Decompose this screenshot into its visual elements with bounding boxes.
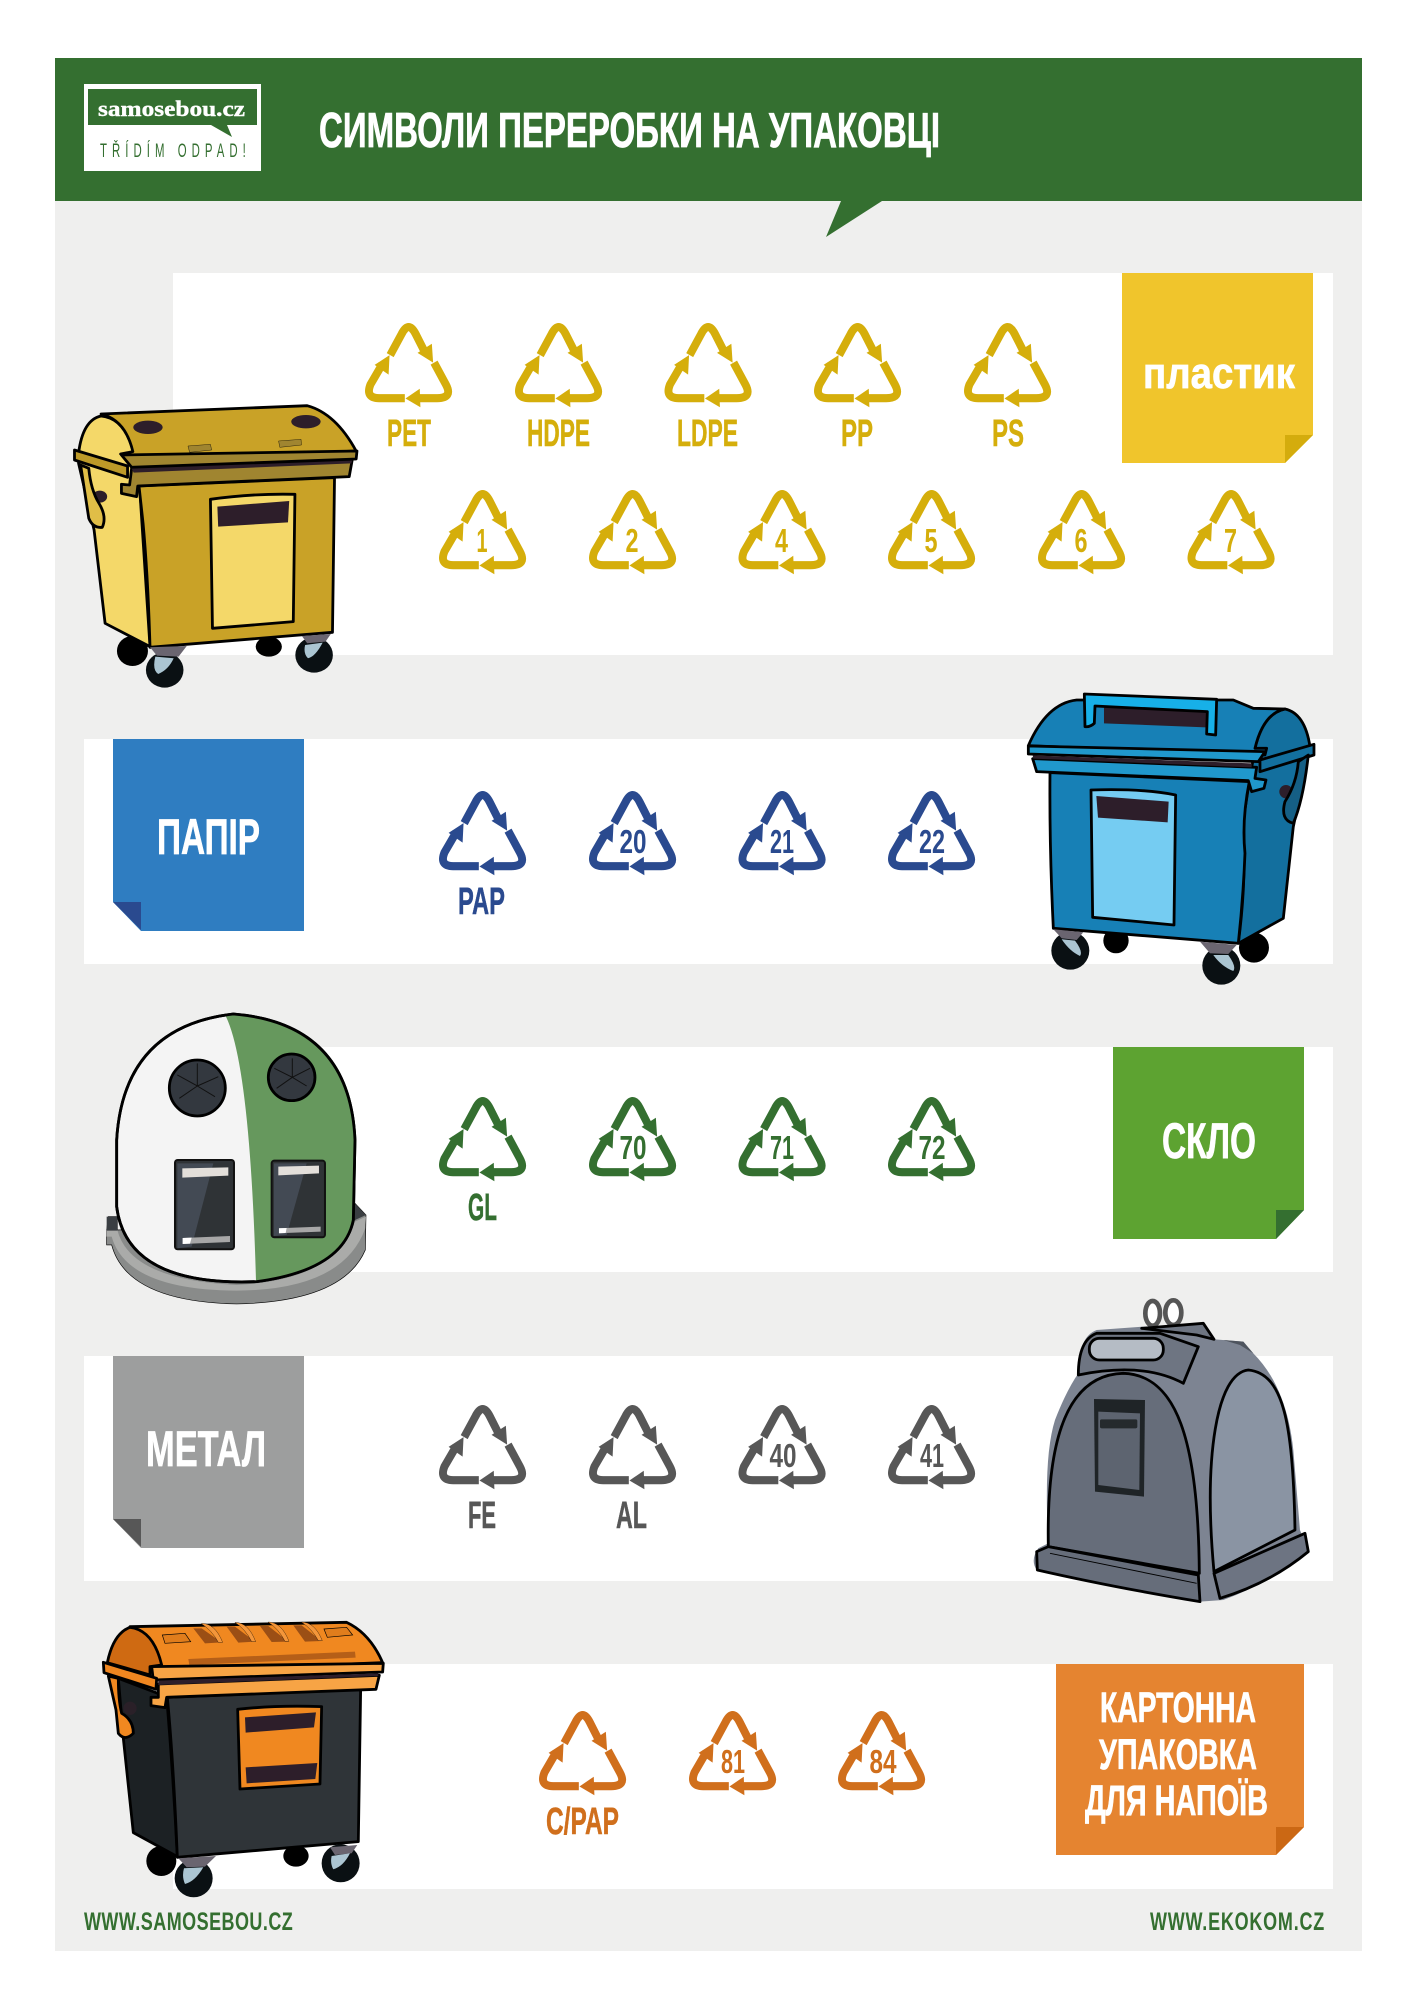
label: beverage carton: КАРТОННА — [1100, 1684, 1256, 1732]
title: СИМВОЛИ ПЕРЕРОБКИ НА УПАКОВЦІ — [319, 104, 940, 158]
panel: plastic row — [173, 273, 1333, 655]
recycling symbols: plastic: 5 — [924, 522, 938, 559]
icon: orange bin — [103, 1622, 383, 1897]
icon: yellow bin — [74, 406, 357, 688]
recycling symbols: glass: GL — [468, 1187, 497, 1229]
logo: samosebou.cz — [98, 96, 245, 121]
icon: blue bin — [1028, 694, 1314, 985]
recycling symbols: glass: 71 — [770, 1129, 794, 1166]
recycling symbols: plastic: LDPE — [677, 413, 738, 455]
recycling symbols: plastic: 2 — [626, 522, 638, 559]
recycling symbols: plastic: PET — [387, 413, 431, 455]
label: metal — [113, 1356, 304, 1548]
footer link: ekokom: WWW.EKOKOM.CZ — [1150, 1907, 1324, 1936]
recycling symbols: plastic: 1 — [476, 522, 488, 559]
label: metal: МЕТАЛ — [146, 1421, 266, 1477]
header banner — [55, 58, 1362, 237]
recycling symbols: plastic: 6 — [1074, 522, 1088, 559]
panel: metal row — [84, 1356, 1333, 1581]
panel: glass row — [173, 1047, 1333, 1272]
panel: paper row — [84, 739, 1333, 964]
label: glass — [1113, 1047, 1304, 1239]
label: glass: СКЛО — [1162, 1113, 1256, 1169]
recycling symbols: beverage carton — [543, 1715, 921, 1843]
label: plastic: пластик — [1143, 349, 1296, 398]
recycling symbols: glass: 70 — [620, 1129, 646, 1166]
label: plastic — [1122, 273, 1313, 463]
recycling symbols: beverage carton: 84 — [870, 1743, 897, 1780]
label: paper: ПАПІР — [157, 809, 260, 865]
recycling symbols: paper: PAP — [458, 881, 505, 923]
icon: green dome container — [107, 1014, 366, 1304]
label: beverage carton: ДЛЯ НАПОЇВ — [1085, 1777, 1268, 1825]
recycling symbols: glass — [443, 1101, 971, 1229]
icon: grey bin — [1034, 1300, 1308, 1602]
recycling symbols: plastic — [369, 327, 1271, 574]
recycling symbols: metal: AL — [616, 1495, 647, 1537]
panel: beverage carton row — [173, 1664, 1333, 1889]
footer link: samosebou: WWW.SAMOSEBOU.CZ — [84, 1907, 293, 1936]
recycling symbols: metal: 41 — [920, 1437, 944, 1474]
recycling symbols: paper — [443, 795, 971, 923]
recycling symbols: paper: 20 — [620, 823, 646, 860]
logo: TŘÍDÍM ODPAD! — [100, 139, 246, 162]
recycling symbols: plastic: PP — [841, 413, 873, 455]
label: beverage carton: УПАКОВКА — [1099, 1731, 1257, 1779]
recycling symbols: paper: 21 — [770, 823, 794, 860]
recycling symbols: beverage carton: 81 — [721, 1743, 745, 1780]
recycling symbols: plastic: HDPE — [527, 413, 590, 455]
recycling symbols: beverage carton: C/PAP — [546, 1801, 619, 1843]
recycling symbols: metal: FE — [468, 1495, 496, 1537]
label: beverage carton — [1056, 1664, 1304, 1855]
recycling symbols: metal — [443, 1409, 971, 1537]
label: paper — [113, 739, 304, 931]
recycling symbols: plastic: PS — [992, 413, 1024, 455]
logo — [84, 84, 261, 171]
recycling symbols: metal: 40 — [770, 1437, 796, 1474]
recycling symbols: paper: 22 — [919, 823, 945, 860]
recycling symbols: glass: 72 — [918, 1129, 946, 1166]
recycling symbols: plastic: 4 — [775, 522, 788, 559]
recycling symbols: plastic: 7 — [1224, 522, 1237, 559]
